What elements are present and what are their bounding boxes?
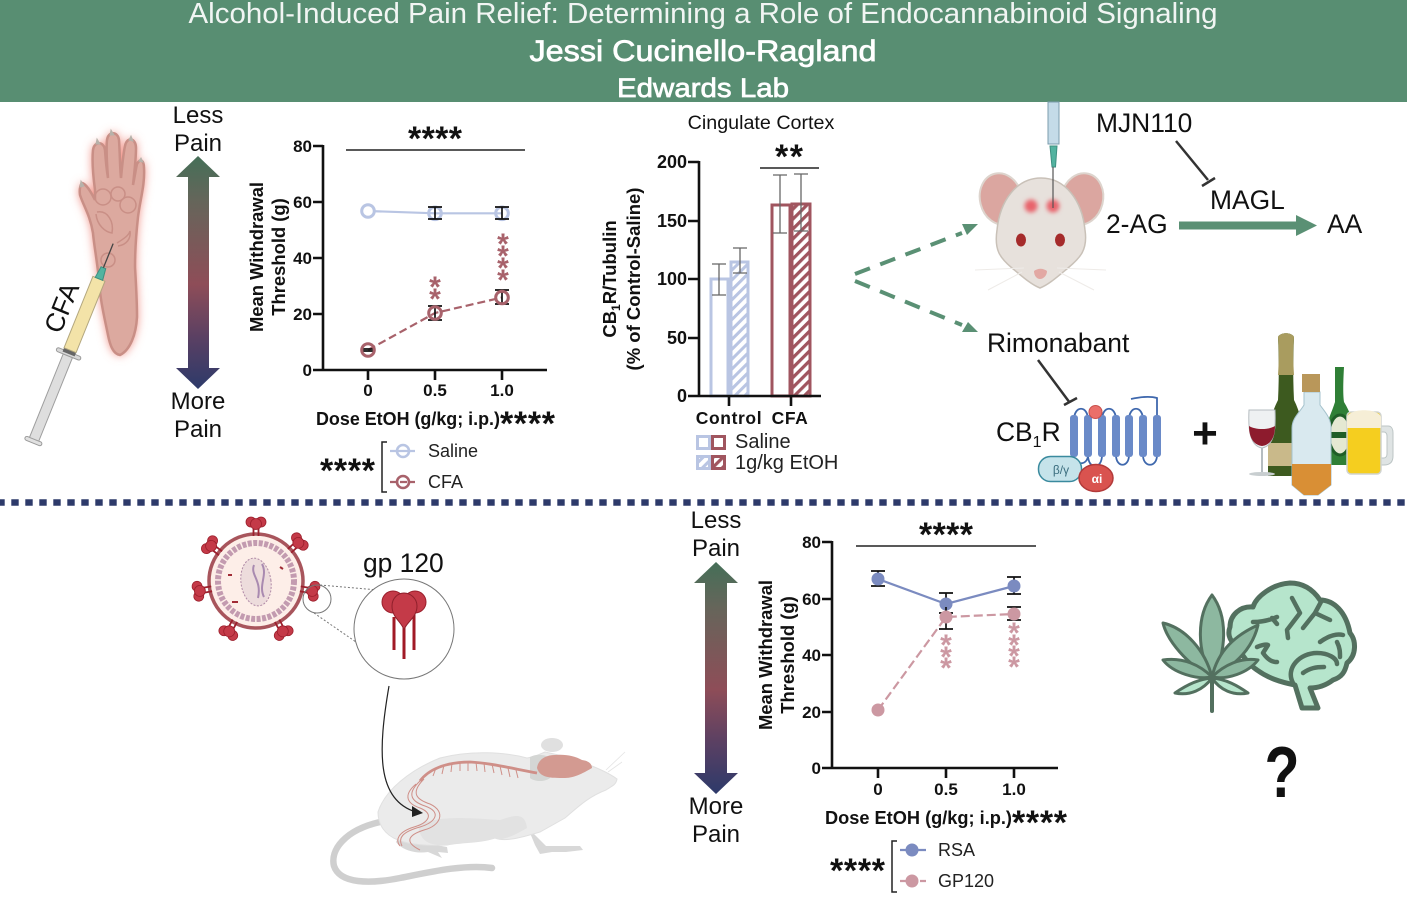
chart: CFA withdrawal threshold: 80 — [293, 137, 312, 156]
chart: CFA withdrawal threshold: 0 — [303, 361, 312, 380]
label: more pain: Pain — [692, 821, 740, 848]
legend: 1g/kg EtOH — [735, 452, 838, 474]
spikes — [191, 517, 321, 642]
y axis title: Mean Withdrawal — [755, 580, 776, 730]
chart: CFA withdrawal threshold: 1.0 — [490, 381, 514, 400]
y axis title: Threshold (g) — [777, 596, 798, 714]
arrow: curved to rat — [382, 686, 423, 817]
plus sign: + — [1192, 409, 1218, 458]
author: Jessi Cucinello-Ragland — [530, 35, 876, 68]
chart: gp120 withdrawal threshold: 40 — [802, 646, 821, 665]
chart title: Cingulate Cortex — [688, 112, 834, 134]
beer bottle — [1327, 367, 1353, 465]
significance asterisks GP120: * — [940, 652, 952, 685]
chart: gp120 withdrawal threshold: **** — [1012, 804, 1068, 842]
legend: RSA — [938, 840, 975, 860]
chart: CFA withdrawal threshold: 40 — [293, 249, 312, 268]
significance asterisks CFA: * — [429, 271, 441, 304]
header banner — [0, 0, 1407, 103]
pathway: Rimonabant: R — [1042, 417, 1061, 447]
legend: GP120 — [938, 871, 994, 891]
brain — [1229, 583, 1355, 708]
significance asterisks GP120 — [940, 617, 1020, 685]
pathway: Rimonabant: Rimonabant — [987, 328, 1130, 358]
pathway: MAGL: 2-AG — [1106, 209, 1168, 239]
icon: CFA syringe — [21, 239, 125, 448]
icon: rat with nervous system — [333, 738, 625, 882]
y axis title: R/Tubulin — [599, 220, 620, 304]
icon: mouse head with injection — [974, 102, 1109, 290]
y axis title: (% of Control-Saline) — [623, 188, 644, 370]
label: more pain: More — [689, 793, 743, 820]
pathway: Rimonabant — [987, 328, 1130, 451]
y axis title: Mean Withdrawal — [246, 182, 267, 332]
chart: CFA withdrawal threshold: 20 — [293, 305, 312, 324]
label: less pain: Pain — [692, 535, 740, 562]
icon: alcohol bottles — [1249, 333, 1393, 495]
chart: CFA withdrawal threshold: 0 — [363, 381, 373, 400]
chart: CFA withdrawal threshold: 60 — [293, 193, 312, 212]
label: more pain: Pain — [174, 416, 222, 443]
significance asterisks GP120: * — [1008, 651, 1020, 684]
pathway: MAGL — [1096, 108, 1363, 239]
label: more pain: More — [171, 388, 225, 415]
legend: CFA — [428, 472, 463, 492]
question mark: ? — [1264, 733, 1300, 813]
chart: gp120 withdrawal threshold — [755, 516, 1068, 892]
icon: HIV virus particle — [191, 517, 321, 642]
legend — [698, 431, 838, 474]
chart: CB1R bar chart: 0 — [677, 386, 687, 406]
icon: CB1 receptor: αi — [1092, 472, 1102, 486]
callout: gp120 zoom: gp 120 — [363, 548, 444, 578]
chart: CB1R bar chart: Control — [696, 408, 762, 428]
arrow: 2-AG to AA — [1179, 215, 1317, 236]
significance asterisks CFA: * — [497, 264, 509, 297]
chart: CFA withdrawal threshold: **** — [408, 120, 463, 158]
chart: gp120 withdrawal threshold: 0 — [873, 780, 883, 799]
chart: CFA withdrawal threshold: 0.5 — [423, 381, 447, 400]
chart: gp120 withdrawal threshold: 0.5 — [934, 780, 958, 799]
legend — [830, 840, 994, 892]
icon: CB1 receptor: β/γ — [1053, 463, 1069, 477]
chart: gp120 withdrawal threshold: 20 — [802, 703, 821, 722]
leaf — [1163, 595, 1258, 711]
arrow: pain gradient — [176, 156, 220, 389]
bars — [711, 204, 810, 396]
callout: gp120 zoom — [303, 548, 454, 679]
icon: CB1 receptor — [1038, 397, 1161, 492]
legend: Saline — [428, 441, 478, 461]
significance asterisks CFA — [429, 228, 509, 316]
divider — [0, 499, 1407, 506]
beer mug — [1378, 426, 1393, 465]
label: less pain: Pain — [174, 130, 222, 157]
chart: CFA withdrawal threshold — [246, 120, 556, 492]
significance asterisks GP120: * — [940, 629, 952, 662]
icon: inflamed rat paw — [80, 130, 144, 355]
icon: cannabis leaf and brain — [1163, 583, 1355, 711]
legend: **** — [320, 452, 376, 490]
whiskey — [1292, 392, 1331, 495]
series: saline — [362, 205, 509, 220]
significance asterisks GP120: * — [1008, 617, 1020, 650]
pathway: Rimonabant: CB — [996, 417, 1033, 447]
significance asterisks CFA: * — [497, 252, 509, 285]
y axis title: Threshold (g) — [268, 198, 289, 316]
y axis title: 1 — [609, 304, 623, 311]
pain scale bottom — [689, 507, 743, 848]
lab name: Edwards Lab — [617, 73, 789, 103]
y axis title: CB — [599, 311, 620, 338]
pathway: MAGL: AA — [1327, 209, 1363, 239]
chart: gp120 withdrawal threshold: 60 — [802, 590, 821, 609]
chart: gp120 withdrawal threshold: 0 — [812, 759, 821, 778]
x axis title: Dose EtOH (g/kg; i.p.) — [316, 408, 500, 429]
arrows: dashed branch to treatments — [855, 224, 978, 332]
significance asterisks CFA: * — [497, 228, 509, 261]
x axis title: Dose EtOH (g/kg; i.p.) — [825, 807, 1012, 828]
chart: CB1R bar chart: ** — [775, 138, 804, 176]
arrow: pain gradient — [694, 562, 738, 794]
label: CFA: CFA — [38, 278, 85, 337]
chart: CB1R bar chart: CFA — [772, 408, 808, 428]
series: RSA — [871, 571, 1021, 613]
chart: gp120 withdrawal threshold: **** — [919, 516, 974, 554]
chart: CB1R bar chart: 150 — [657, 211, 687, 231]
significance asterisks GP120: * — [1008, 629, 1020, 662]
legend — [320, 441, 478, 492]
significance asterisks GP120: * — [940, 641, 952, 674]
pathway: MAGL: MAGL — [1210, 185, 1285, 215]
significance asterisks GP120: * — [1008, 640, 1020, 673]
series: GP120 — [872, 607, 1021, 716]
inhibition line MJN110 — [1176, 141, 1215, 186]
champagne — [1268, 333, 1303, 476]
wine glass — [1249, 410, 1275, 448]
chart: CB1R bar chart: 100 — [657, 269, 687, 289]
significance asterisks CFA: * — [429, 283, 441, 316]
chart: CB1R bar chart — [599, 112, 838, 474]
label: less pain: Less — [691, 507, 741, 534]
chart: CB1R bar chart: 50 — [667, 328, 687, 348]
chart: gp120 withdrawal threshold: 80 — [802, 533, 821, 552]
significance asterisks CFA: * — [497, 240, 509, 273]
label: less pain: Less — [173, 102, 223, 129]
series: CFA — [361, 290, 509, 356]
chart: CFA withdrawal threshold: **** — [500, 405, 556, 443]
pathway: Rimonabant: 1 — [1033, 434, 1042, 451]
chart: CB1R bar chart: 200 — [657, 152, 687, 172]
legend: Saline — [735, 431, 791, 453]
chart: gp120 withdrawal threshold: 1.0 — [1002, 780, 1026, 799]
pain scale top — [171, 102, 225, 443]
legend: **** — [830, 852, 886, 890]
pathway: MAGL: MJN110 — [1096, 108, 1192, 138]
